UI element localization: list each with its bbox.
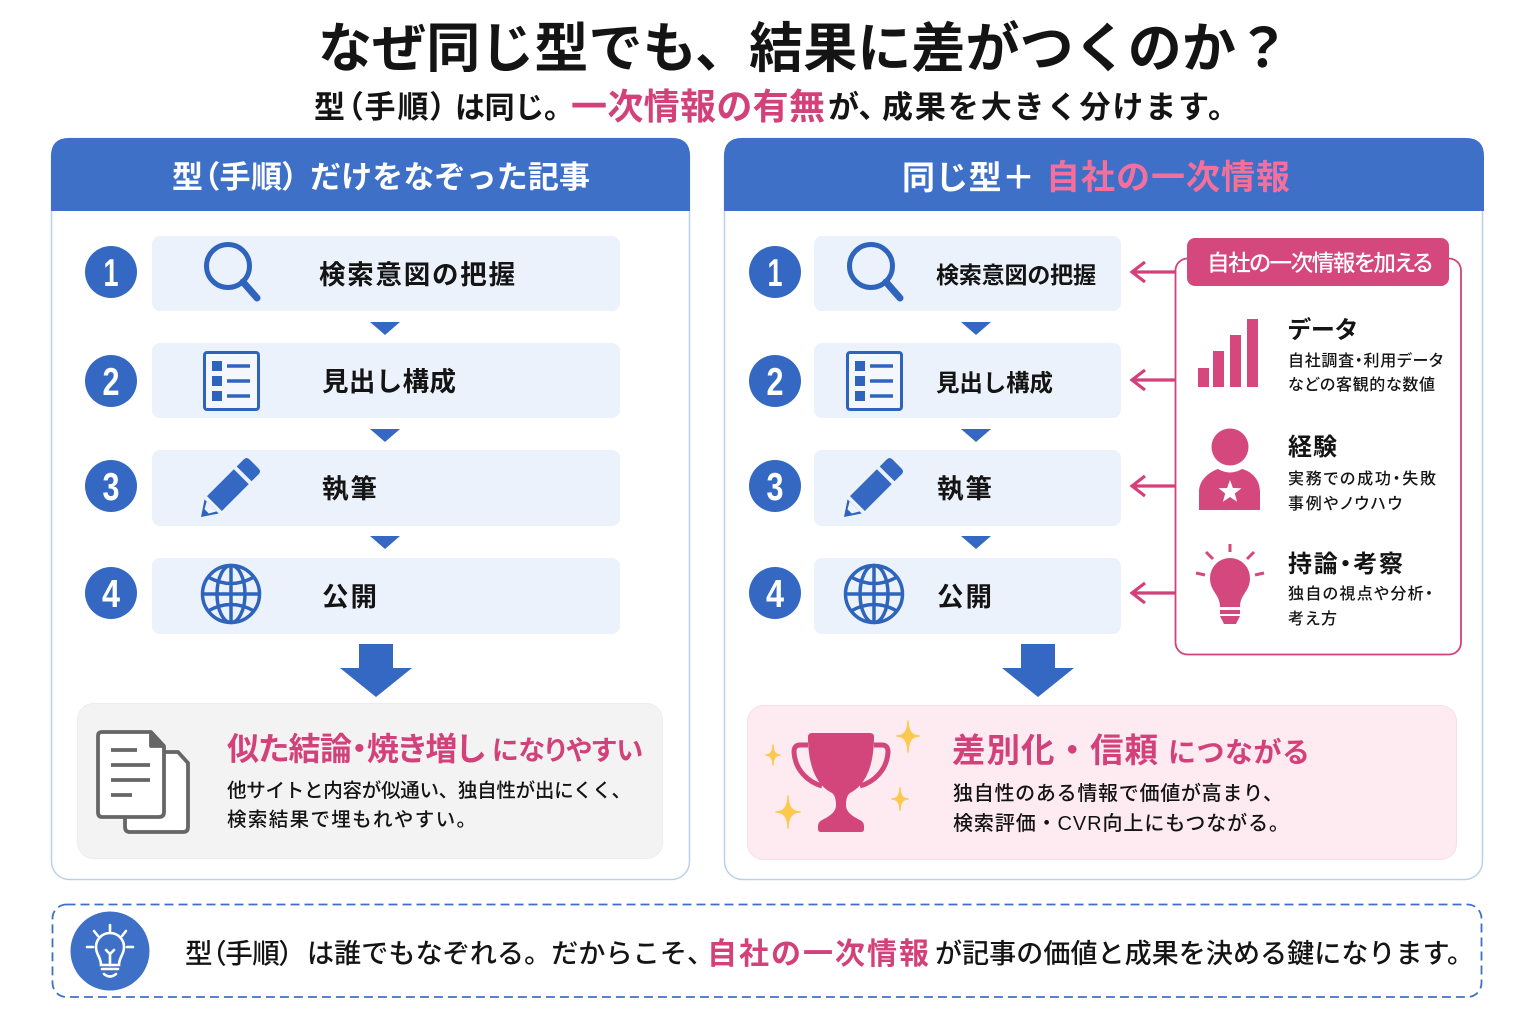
text: opinion: 考え方 <box>1288 610 1337 628</box>
left panel heading: だけをなぞった記事 <box>310 160 590 195</box>
first-party heading tag: 自社の一次情報を加える <box>1207 251 1433 276</box>
result box: differentiation: 独自性のある情報で価値が高まり、 <box>953 782 1283 805</box>
step 4 <box>85 558 620 634</box>
text: experience: 実務での成功・失敗 <box>1288 470 1436 488</box>
step 2 <box>85 343 620 418</box>
step 3 <box>85 450 620 526</box>
step 4: 公開 <box>937 582 992 612</box>
step 4: 公開 <box>322 582 377 612</box>
step 2: 見出し構成 <box>936 370 1053 396</box>
text: experience <box>1288 434 1436 513</box>
text: opinion: 独自の視点や分析・ <box>1288 585 1433 603</box>
subtitle <box>314 86 1239 127</box>
connector triangle <box>370 536 400 549</box>
left panel heading: 型（手順） <box>172 160 298 195</box>
step 3 <box>749 450 1121 526</box>
right panel heading: 自社の一次情報 <box>1046 159 1290 197</box>
text: data <box>1288 316 1443 394</box>
step 4 <box>749 558 1121 634</box>
step 3: 執筆 <box>937 474 992 504</box>
result box: similar conclusions: 他サイトと内容が似通い、独自性が出にくく、 <box>227 780 631 802</box>
connector triangle <box>370 429 400 442</box>
big down arrow <box>1002 644 1074 697</box>
footer callout: が記事の価値と成果を決める鍵になります。 <box>935 939 1474 969</box>
step 1 <box>85 236 620 311</box>
icon: person with star <box>1199 428 1260 510</box>
text: opinion: 持論・考察 <box>1288 551 1403 578</box>
result box: differentiation: 検索評価・CVR向上にもつながる。 <box>953 812 1289 835</box>
footer callout: は誰でもなぞれる。だからこそ、 <box>307 939 714 969</box>
result box: similar conclusions <box>78 704 662 858</box>
text: opinion <box>1288 551 1433 628</box>
step 4: 4 <box>102 573 120 616</box>
right panel heading <box>724 138 1484 211</box>
footer callout: 型（手順） <box>185 938 293 969</box>
result box: differentiation <box>748 706 1456 860</box>
left panel frame <box>52 138 690 880</box>
connector triangle <box>961 322 991 335</box>
big down arrow <box>340 644 412 697</box>
subtitle: が、 <box>828 90 889 125</box>
step 3: 3 <box>766 466 784 509</box>
arrows from first-party info to steps <box>1132 262 1175 603</box>
step 1: 1 <box>768 252 782 295</box>
step 1: 検索意図の把握 <box>319 260 515 290</box>
step 2 <box>749 343 1121 418</box>
icon: idea bulb in circle <box>70 912 150 990</box>
step 3: 3 <box>102 466 120 509</box>
right panel frame <box>724 138 1482 880</box>
connector triangle <box>961 429 991 442</box>
subtitle: は同じ。 <box>455 92 574 125</box>
text: experience: 事例やノウハウ <box>1288 495 1402 513</box>
icon: trophy <box>766 721 919 832</box>
connector triangle <box>370 322 400 335</box>
footer callout <box>52 904 1482 997</box>
subtitle: 一次情報の有無 <box>571 86 825 127</box>
result box: differentiation: 差別化・信頼 <box>952 733 1158 770</box>
icon: light bulb <box>1196 544 1264 624</box>
title: なぜ同じ型でも、結果に差がつくのか？ <box>318 19 1290 79</box>
step 2: 見出し構成 <box>322 367 456 397</box>
panel: right process <box>724 138 1484 880</box>
connector triangle <box>961 536 991 549</box>
subtitle: 成果を大きく分けます。 <box>882 90 1239 125</box>
footer callout: 自社の一次情報 <box>707 938 929 971</box>
step 2: 2 <box>102 361 120 404</box>
step 3: 執筆 <box>322 474 377 504</box>
step 1: 1 <box>104 252 118 295</box>
right panel heading: 同じ型＋ <box>902 159 1035 196</box>
text: data: などの客観的な数値 <box>1288 376 1435 394</box>
result box: similar conclusions: 検索結果で埋もれやすい。 <box>227 809 476 831</box>
subtitle: 型（手順） <box>314 90 446 125</box>
result box: differentiation: につながる <box>1168 736 1310 768</box>
result box: similar conclusions: 似た結論・焼き増し <box>227 731 485 767</box>
step 2: 2 <box>766 361 784 404</box>
step 4: 4 <box>766 573 784 616</box>
result box: similar conclusions: になりやすい <box>492 736 643 766</box>
first-party heading tag <box>1187 238 1449 286</box>
text: experience: 経験 <box>1288 434 1337 461</box>
panel: first-party information <box>1176 238 1461 654</box>
text: data: 自社調査・利用データ <box>1288 351 1443 370</box>
icon: bar chart <box>1198 319 1258 387</box>
step 1 <box>749 236 1121 311</box>
icon: duplicate documents <box>98 732 188 832</box>
panel: left process <box>51 138 690 880</box>
text: data: データ <box>1288 316 1357 344</box>
left panel heading <box>51 138 690 211</box>
step 1: 検索意図の把握 <box>936 262 1096 288</box>
